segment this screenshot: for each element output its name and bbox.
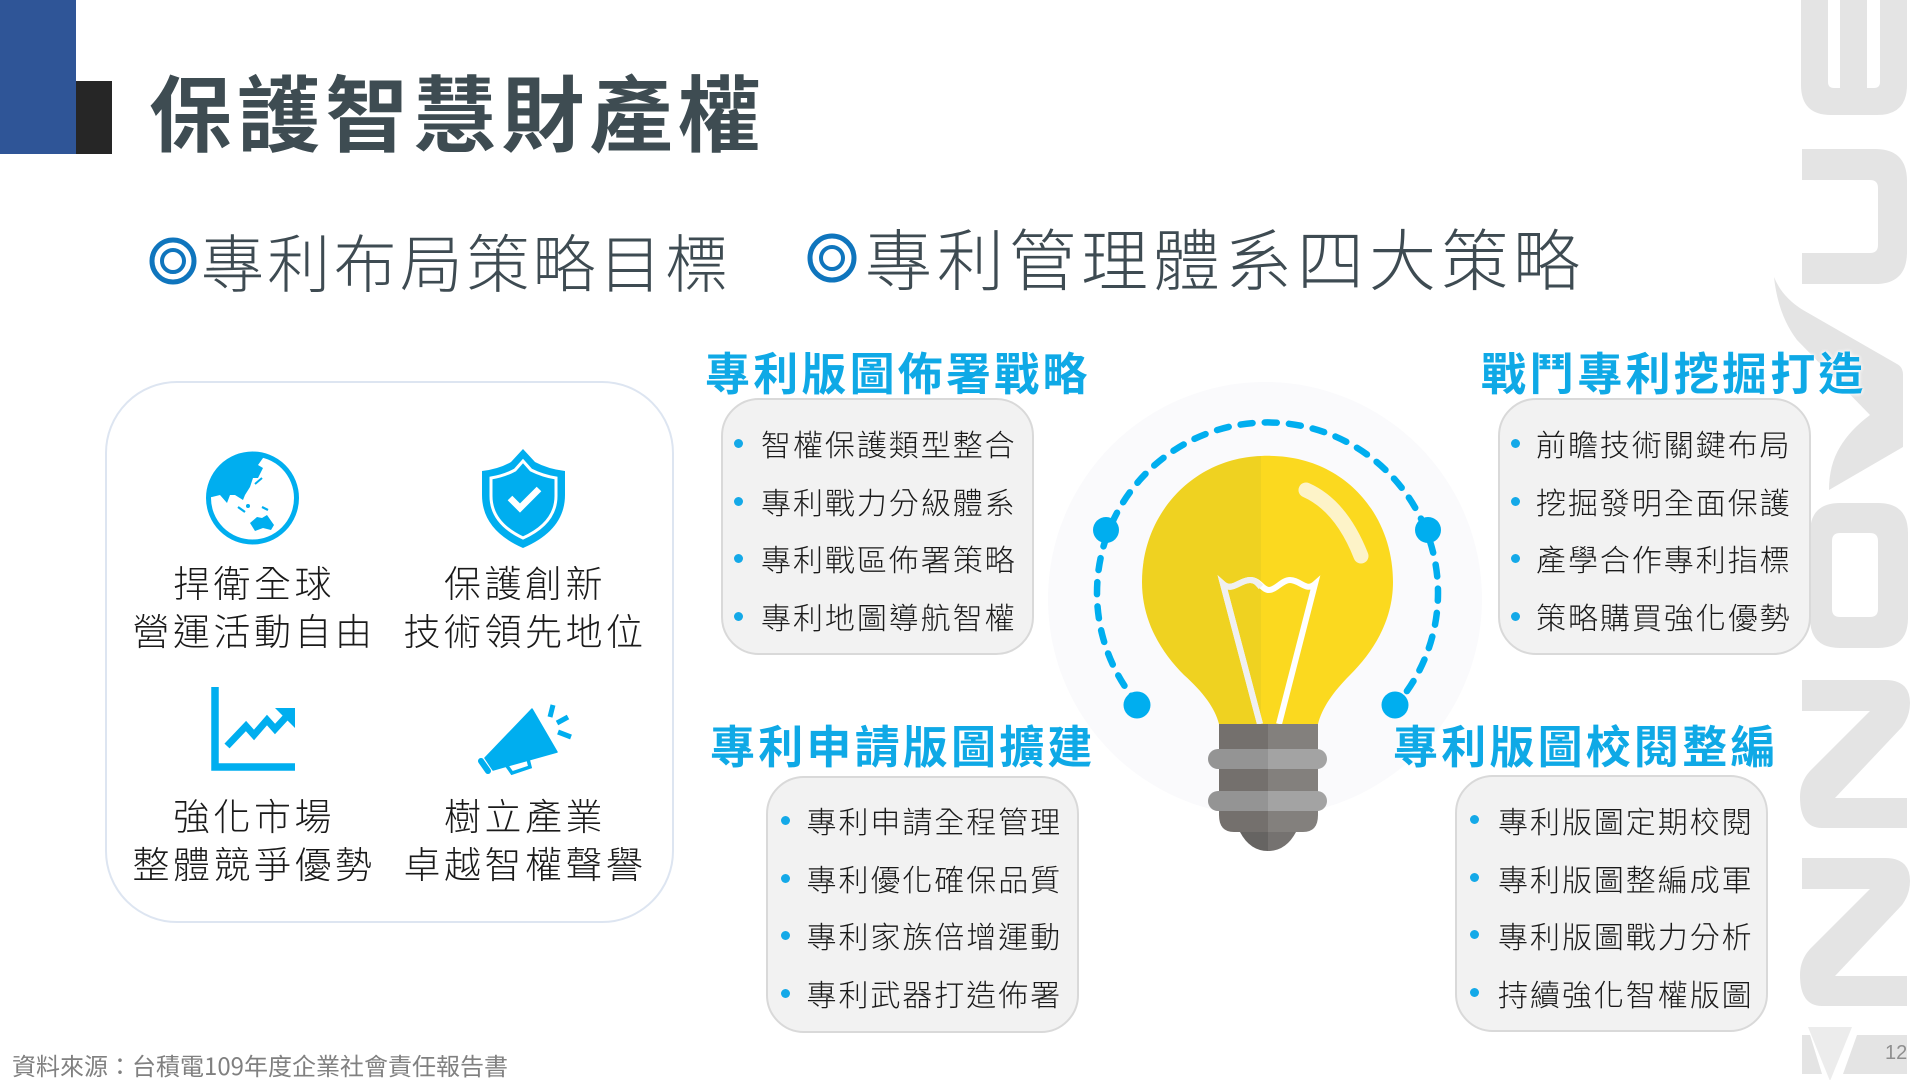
bullet 1 — [734, 439, 743, 448]
icon: megaphone — [478, 704, 572, 776]
heading: patent territory review: 專利版圖校閱整編 — [1393, 711, 1779, 776]
text: strengthen market — [132, 787, 376, 889]
heading: combat patent mining: 戰鬥專利挖掘打造 — [1481, 338, 1867, 403]
item 2: 專利優化確保品質 — [806, 856, 1062, 900]
bullet 2 — [1470, 873, 1479, 882]
text: strengthen market: 強化市場 — [173, 787, 335, 841]
item 2: 專利戰力分級體系 — [761, 479, 1017, 523]
heading text: 專利布局策略目標 — [201, 215, 731, 306]
heading: patent territory deployment: 專利版圖佈署戰略 — [705, 338, 1091, 403]
text: establish reputation: 樹立產業 — [444, 787, 606, 841]
bullet 4 — [734, 612, 743, 621]
text: establish reputation: 卓越智權聲譽 — [404, 835, 646, 889]
item 4: 專利地圖導航智權 — [761, 594, 1017, 638]
bullet 4 — [1511, 612, 1520, 621]
text: defend global operations: 捍衛全球 — [173, 554, 335, 608]
icon: bullseye — [150, 238, 196, 284]
heading: patent application expansion: 專利申請版圖擴建 — [710, 711, 1096, 776]
panel: goals — [105, 381, 674, 923]
panel: combat patent list — [1498, 398, 1811, 655]
bullet 3 — [734, 554, 743, 563]
bullet 1 — [1470, 815, 1479, 824]
bullet 4 — [780, 988, 790, 998]
text: defend global operations: 營運活動自由 — [132, 602, 376, 656]
header accent block — [0, 0, 112, 154]
item 2: 挖掘發明全面保護 — [1536, 479, 1792, 523]
page number: 12 — [1885, 1042, 1907, 1064]
item 4: 持續強化智權版圖 — [1498, 971, 1754, 1015]
panel: territory review list — [1455, 775, 1768, 1032]
item 2: 專利版圖整編成軍 — [1498, 856, 1754, 900]
icon: bullseye — [808, 234, 856, 282]
item 1: 智權保護類型整合 — [761, 421, 1017, 465]
item 1: 專利申請全程管理 — [806, 798, 1062, 842]
item 4: 策略購買強化優勢 — [1536, 594, 1792, 638]
icon: growth chart — [211, 687, 295, 771]
bullet 4 — [1470, 988, 1479, 997]
bullet 3 — [780, 930, 790, 940]
item 4: 專利武器打造佈署 — [806, 970, 1062, 1014]
text: protect innovation: 保護創新 — [444, 554, 606, 608]
item 3: 產學合作專利指標 — [1536, 536, 1792, 580]
illustration: light bulb — [1093, 419, 1442, 851]
text: strengthen market: 整體競爭優勢 — [132, 835, 376, 889]
heading text: 專利管理體系四大策略 — [865, 208, 1585, 305]
bullet 1 — [1511, 439, 1520, 448]
bullet 3 — [1470, 930, 1479, 939]
item 1: 前瞻技術關鍵布局 — [1536, 421, 1792, 465]
panel: territory deployment list — [721, 398, 1034, 655]
bullet 2 — [1511, 497, 1520, 506]
title: 保護智慧財產權 — [149, 49, 766, 169]
bullet 1 — [780, 816, 790, 824]
text: protect innovation — [404, 554, 646, 656]
heading: four strategies — [808, 208, 1585, 305]
item 3: 專利戰區佈署策略 — [761, 536, 1017, 580]
text: protect innovation: 技術領先地位 — [404, 602, 646, 656]
item 1: 專利版圖定期校閱 — [1498, 798, 1754, 842]
icon: globe — [206, 452, 299, 544]
bullet 2 — [734, 497, 743, 506]
text: defend global operations — [132, 554, 376, 656]
item 3: 專利版圖戰力分析 — [1498, 913, 1754, 957]
bullet 3 — [1511, 554, 1520, 563]
item 3: 專利家族倍增運動 — [806, 912, 1062, 956]
text: establish reputation — [404, 787, 646, 889]
heading: patent layout goals — [150, 215, 731, 306]
icon: shield check — [482, 449, 565, 548]
bullet 2 — [780, 874, 790, 882]
panel: application expansion list — [766, 776, 1079, 1033]
